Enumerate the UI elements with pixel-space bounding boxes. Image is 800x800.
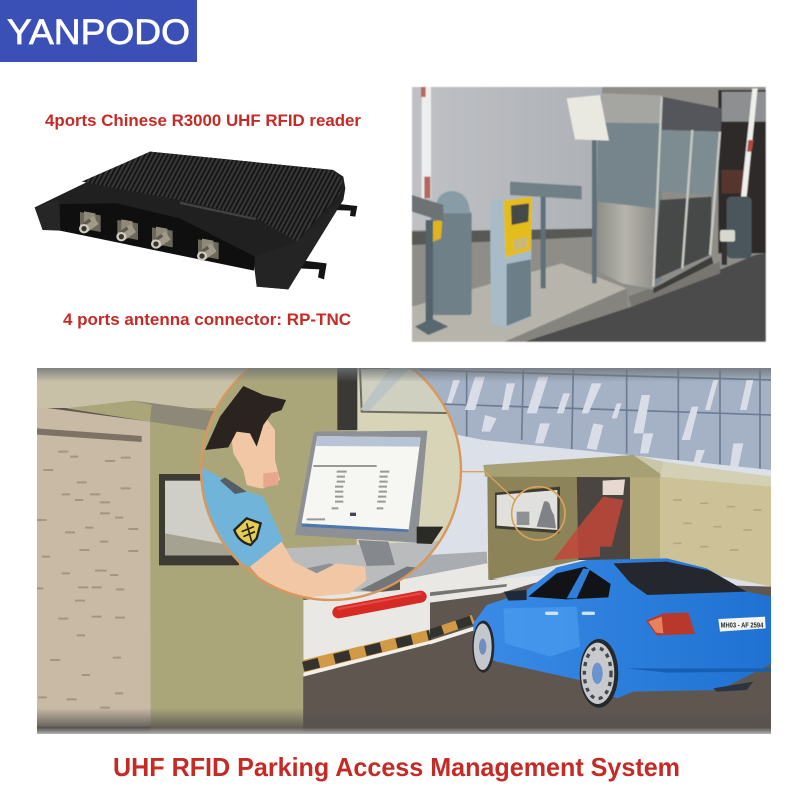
road edge curb (430, 615, 474, 638)
guard uniform (198, 467, 283, 567)
heading: system title: UHF RFID Parking Access Management System (113, 752, 680, 782)
right half of scene (400, 368, 772, 708)
rear wheel (580, 639, 618, 708)
rfid signal beam (553, 497, 623, 560)
front wheel (472, 621, 494, 673)
brick wall face (37, 407, 151, 727)
monitor stand (358, 540, 395, 566)
booth window (159, 474, 239, 565)
left half of scene (37, 337, 463, 737)
building glass facade (400, 368, 772, 470)
upper building (37, 368, 248, 408)
small magnifier ring (512, 487, 565, 540)
heading: reader title: 4ports Chinese R3000 UHF RFID reader (45, 111, 361, 130)
right corner block (255, 198, 343, 289)
curb (303, 629, 430, 675)
left corner block (35, 199, 61, 230)
boundary wall (658, 473, 772, 587)
connector 2 (116, 219, 138, 241)
circle background (208, 368, 357, 548)
antenna on pole (592, 140, 597, 283)
heat-sink fins (82, 152, 343, 242)
logo badge: YANPODO (7, 13, 190, 52)
mounting brackets (298, 203, 357, 279)
booth (483, 455, 663, 580)
circle outline (201, 340, 461, 600)
badge (234, 518, 261, 545)
desk (286, 541, 438, 592)
car (472, 558, 772, 708)
epaulette (220, 477, 247, 494)
sign post (510, 182, 582, 199)
concrete island (412, 263, 627, 342)
ticket machine (490, 197, 532, 328)
bottom edge shade (37, 708, 771, 734)
side of building (150, 408, 304, 730)
reader body (35, 152, 345, 289)
connector 3 (151, 227, 173, 249)
road (525, 253, 766, 342)
pale forecourt wall (430, 434, 771, 587)
hair (205, 386, 286, 450)
red barrier arm (338, 593, 421, 612)
photo: parking booth with antenna (412, 87, 766, 342)
product photo: RFID reader (35, 152, 357, 289)
booth (596, 94, 662, 290)
caption: antenna connector: 4 ports antenna connector: RP-TNC (63, 310, 351, 329)
barrier box left (431, 212, 472, 315)
white forecourt below circle (303, 587, 430, 662)
rfid antenna sign (603, 479, 625, 495)
car: MH03 - AF 2594 (721, 620, 764, 629)
magnifier circle (202, 368, 460, 598)
monitor (295, 431, 427, 543)
connector 1 (79, 211, 101, 233)
barrier gate background (718, 90, 766, 253)
arm (250, 542, 367, 598)
keyboard (360, 566, 416, 592)
illustration: parking access scene (37, 337, 772, 737)
barrier arm line (430, 584, 507, 596)
logo badge (0, 0, 197, 62)
connector 4 (197, 239, 219, 261)
wall (412, 87, 602, 230)
top edge shade (37, 368, 771, 380)
front face (60, 203, 255, 271)
neck and face (232, 420, 280, 488)
